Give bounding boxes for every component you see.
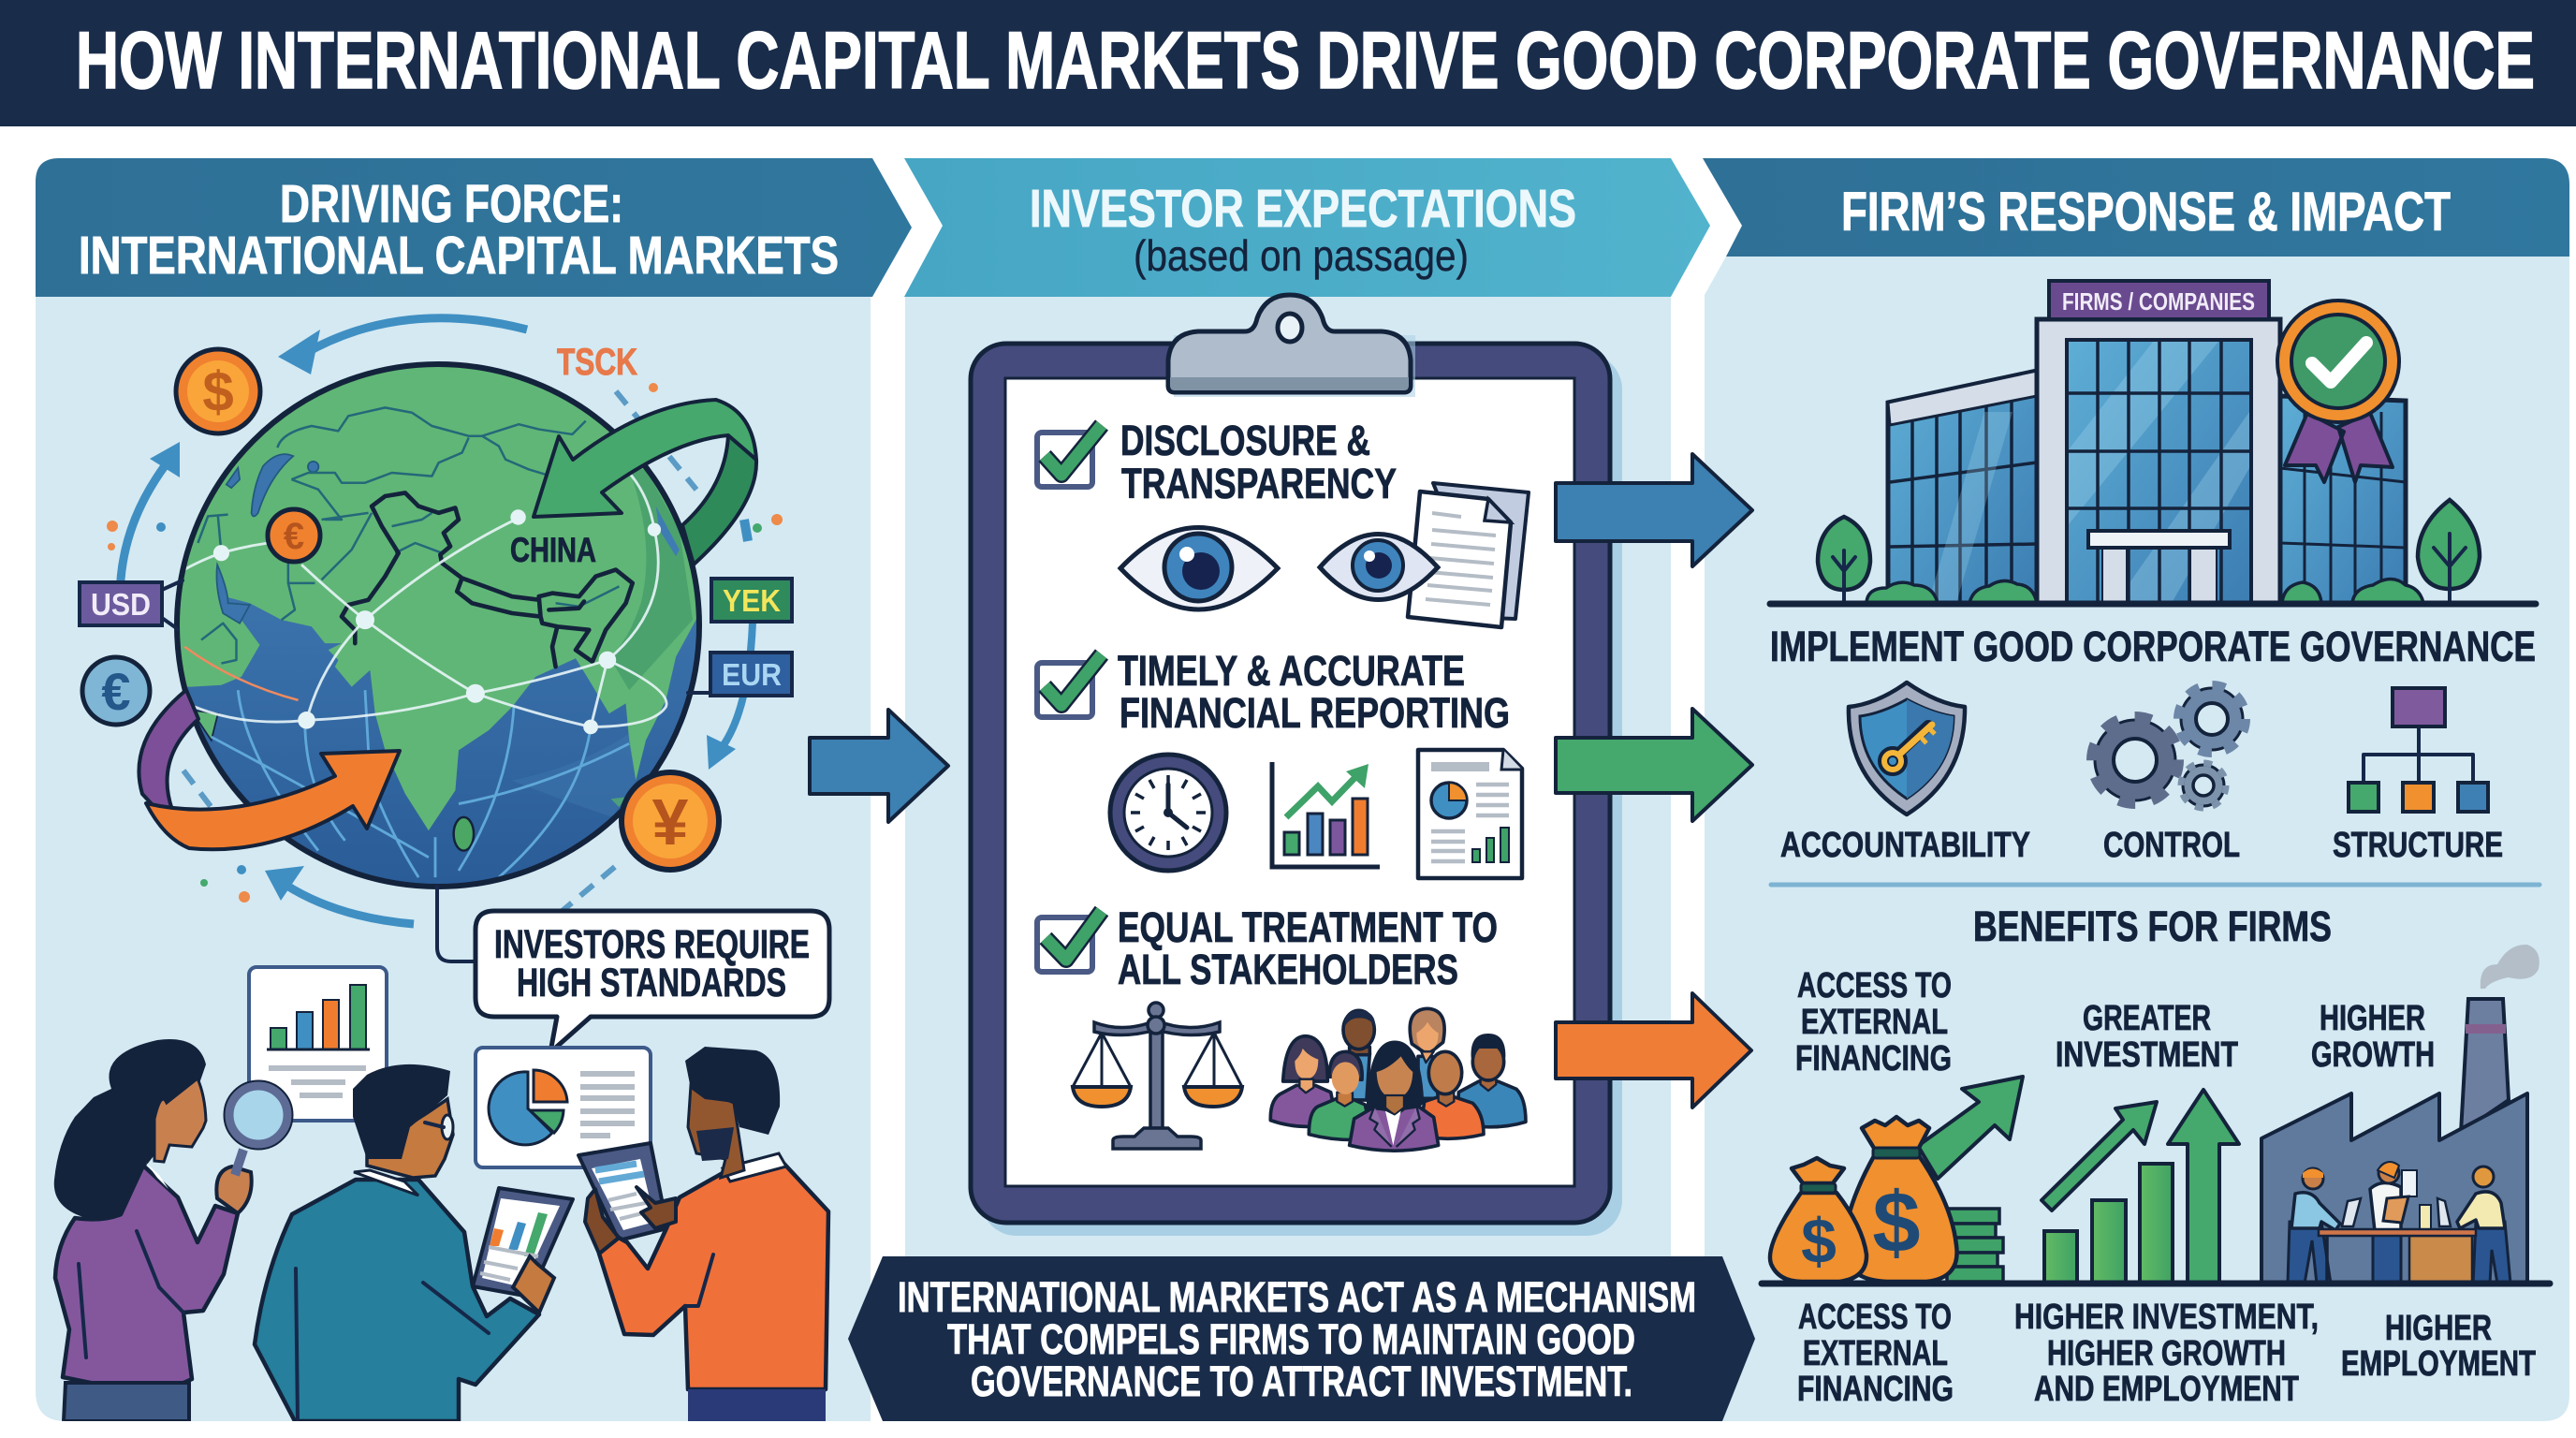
checklist item: equal treatment: EQUAL TREATMENT TO xyxy=(1118,903,1498,951)
clipboard clip xyxy=(1168,295,1411,392)
illustration: factory and employees xyxy=(2261,945,2539,1284)
label: accountability: ACCOUNTABILITY xyxy=(1780,826,2030,865)
checklist item: timely and accurate reporting: FINANCIAL REPORTING xyxy=(1120,689,1510,737)
icon: stakeholders group xyxy=(1270,1008,1526,1151)
label: higher employment: HIGHER xyxy=(2385,1309,2492,1348)
label: greater investment: GREATER xyxy=(2083,999,2211,1038)
panel heading: investor expectations: INVESTOR EXPECTATIONS xyxy=(1030,179,1576,239)
icon: growth chart xyxy=(1272,762,1380,867)
label: greater investment: INVESTMENT xyxy=(2056,1035,2238,1075)
back man head xyxy=(1343,1010,1374,1049)
factory smoke xyxy=(2481,945,2539,989)
panel heading: firm's response xyxy=(1703,158,2569,257)
icon: gears xyxy=(2092,685,2246,808)
left woman xyxy=(1270,1085,1337,1126)
front left xyxy=(1309,1098,1373,1140)
panel body: driving force xyxy=(36,297,871,1421)
label: TSCK: TSCK xyxy=(557,342,637,383)
country borders xyxy=(198,407,619,664)
right man xyxy=(1457,1081,1526,1127)
currency tag: YEK xyxy=(711,579,792,622)
icon: shield and key xyxy=(1849,682,1965,814)
icon: balance scale xyxy=(1073,1003,1242,1149)
building left wing xyxy=(1888,371,2037,603)
icon: trees and shrubs xyxy=(1818,500,2480,603)
panel heading: driving force: DRIVING FORCE: xyxy=(280,174,623,234)
icon: org structure xyxy=(2349,688,2488,812)
speech bubble: investors require high standards xyxy=(476,911,829,1052)
checklist item: disclosure and transparency: DISCLOSURE & xyxy=(1120,417,1370,464)
icon: report document xyxy=(1418,750,1522,878)
panel: investor expectations xyxy=(810,158,1710,1421)
arrow: markets to expectations xyxy=(810,710,948,822)
panel heading: driving force xyxy=(36,158,912,297)
speech bubble: investors require high standards: INVESTORS REQUIRE xyxy=(494,922,810,967)
checklist item: equal treatment: ALL STAKEHOLDERS xyxy=(1118,946,1458,993)
checkbox xyxy=(1037,911,1102,972)
land masses xyxy=(180,367,696,830)
label: control: CONTROL xyxy=(2103,826,2240,865)
panel heading: investor expectations: (based on passage) xyxy=(1134,231,1469,280)
conclusion banner: GOVERNANCE TO ATTRACT INVESTMENT. xyxy=(971,1357,1632,1405)
icon: tablet right xyxy=(578,1143,667,1240)
label: access to external financing (bottom): ACCESS TO xyxy=(1798,1298,1952,1337)
center woman xyxy=(1368,1042,1422,1109)
icon: large money bag: $ xyxy=(1872,1175,1921,1270)
panel heading: investor expectations xyxy=(904,158,1710,297)
building main tower xyxy=(2037,319,2280,603)
chart card: bars xyxy=(249,967,387,1121)
callout connector xyxy=(437,887,477,961)
panel: firm's response xyxy=(1703,158,2569,1421)
arrow: orange equal treatment to firm xyxy=(1556,993,1751,1108)
conclusion banner: THAT COMPELS FIRMS TO MAINTAIN GOOD xyxy=(947,1315,1635,1363)
workers at desk xyxy=(2288,1162,2510,1284)
speech bubble: investors require high standards: HIGH STANDARDS xyxy=(517,961,786,1005)
label: access to external financing (bottom) xyxy=(1797,1298,1954,1409)
icon: approval badge xyxy=(2277,301,2399,482)
checklist item: disclosure and transparency xyxy=(1037,417,1529,627)
building sign xyxy=(2049,281,2269,319)
label: higher growth xyxy=(2311,999,2435,1075)
factory chimney xyxy=(2461,999,2509,1133)
arrow: blue disclosure to firm xyxy=(1556,454,1752,566)
India outline xyxy=(342,492,633,667)
checklist item: disclosure and transparency: TRANSPARENCY xyxy=(1121,460,1397,507)
desk and laptops xyxy=(2319,1198,2476,1284)
arrow: green globe swirl xyxy=(534,400,756,565)
globe xyxy=(158,336,720,887)
coral trade line xyxy=(184,647,299,700)
label: higher growth: HIGHER xyxy=(2320,999,2425,1038)
person: man with tablet xyxy=(255,1064,573,1421)
currency tag: EUR: EUR xyxy=(722,657,782,692)
icon: euro coin on globe: € xyxy=(284,516,304,557)
trade network lines xyxy=(178,473,666,726)
worker right xyxy=(2457,1167,2510,1284)
clipboard xyxy=(971,295,1622,1236)
icon: magnifying glass xyxy=(225,1081,292,1175)
chart card: pie xyxy=(476,1048,651,1167)
conclusion banner: INTERNATIONAL MARKETS ACT AS A MECHANISM xyxy=(898,1273,1696,1321)
person: man in orange xyxy=(578,1047,828,1421)
panel body: investor expectations xyxy=(905,297,1671,1421)
heading: benefits for firms: BENEFITS FOR FIRMS xyxy=(1973,902,2332,950)
checklist item: timely and accurate reporting: TIMELY & ACCURATE xyxy=(1118,647,1465,695)
label: access to external financing (top): EXTERNAL xyxy=(1801,1003,1948,1042)
currency tag: USD xyxy=(80,580,183,629)
label: access to external financing (top) xyxy=(1795,966,1952,1078)
panel: driving force xyxy=(36,158,912,1421)
label: higher investment, growth and employment: AND EMPLOYMENT xyxy=(2034,1370,2299,1409)
person: woman with magnifier xyxy=(54,1039,292,1421)
label: greater investment xyxy=(2056,999,2238,1075)
label: access to external financing (top): ACCESS TO xyxy=(1797,966,1952,1005)
icon: yen coin xyxy=(622,772,719,870)
label: higher growth: GROWTH xyxy=(2311,1035,2435,1075)
back woman head xyxy=(1410,1008,1444,1055)
building right wing xyxy=(2280,396,2406,603)
arrow: diagonal growth xyxy=(2042,1102,2157,1211)
checklist item: equal treatment xyxy=(1037,903,1526,1151)
building sign: FIRMS / COMPANIES xyxy=(2062,287,2255,315)
currency tag: YEK: YEK xyxy=(723,583,781,618)
orbit arrows around globe xyxy=(120,318,753,924)
icon: blue euro coin xyxy=(82,657,150,725)
label: higher investment, growth and employment: HIGHER GROWTH xyxy=(2047,1334,2286,1373)
checklist item: timely and accurate reporting xyxy=(1037,647,1522,878)
icon: eye xyxy=(1120,528,1278,609)
arrow: green reporting to firm xyxy=(1556,709,1752,821)
conclusion banner xyxy=(848,1256,1755,1421)
illustration: money bags xyxy=(1770,1077,2023,1282)
icon: dollar coin: $ xyxy=(202,360,234,423)
inland seas xyxy=(216,454,318,624)
icon: small money bag: $ xyxy=(1801,1206,1837,1277)
bar chart: growth bars with arrows xyxy=(2042,1090,2239,1284)
icon: large money bag xyxy=(1845,1117,1957,1282)
title banner xyxy=(0,0,2576,126)
panel heading: driving force: INTERNATIONAL CAPITAL MARKETS xyxy=(79,226,839,286)
panel body: firm's response xyxy=(1705,257,2569,1421)
icon: blue euro coin: € xyxy=(101,662,131,721)
icon: tablet left xyxy=(473,1188,573,1297)
label: China: CHINA xyxy=(510,531,596,569)
currency tag: EUR xyxy=(688,653,792,696)
arrow: orange globe swirl xyxy=(139,690,400,849)
icon: euro coin on globe xyxy=(268,509,320,562)
label: access to external financing (top): FINANCING xyxy=(1795,1039,1952,1078)
worker left xyxy=(2288,1168,2340,1284)
ocean meridians xyxy=(212,690,629,877)
label: higher employment xyxy=(2341,1309,2536,1384)
label: higher investment, growth and employment: HIGHER INVESTMENT, xyxy=(2014,1298,2319,1337)
icon: green up arrow xyxy=(1918,1077,2023,1179)
arrow: vertical growth xyxy=(2168,1090,2239,1284)
checkbox xyxy=(1037,425,1102,487)
icon: stack of notes xyxy=(1947,1209,2003,1282)
illustration: headquarters building xyxy=(1770,281,2536,604)
factory building xyxy=(2261,1093,2527,1284)
label: higher investment, growth and employment xyxy=(2014,1298,2319,1409)
icon: clock xyxy=(1110,755,1226,871)
decorative dots xyxy=(107,383,783,902)
illustration: investors xyxy=(54,1039,828,1421)
icon: small money bag xyxy=(1770,1158,1866,1282)
worker center xyxy=(2370,1162,2417,1284)
label: access to external financing (bottom): EXTERNAL xyxy=(1803,1334,1948,1373)
icon: eye and documents xyxy=(1320,483,1529,627)
front right xyxy=(1420,1097,1484,1138)
label: access to external financing (bottom): FINANCING xyxy=(1797,1370,1954,1409)
back torsos xyxy=(1348,1053,1439,1100)
label: structure: STRUCTURE xyxy=(2333,826,2503,865)
checkbox xyxy=(1037,654,1102,717)
icon: dollar coin xyxy=(176,349,260,433)
hands on tablet xyxy=(585,1187,676,1254)
currency tag: USD: USD xyxy=(91,587,151,622)
icon: yen coin: ¥ xyxy=(652,785,689,858)
